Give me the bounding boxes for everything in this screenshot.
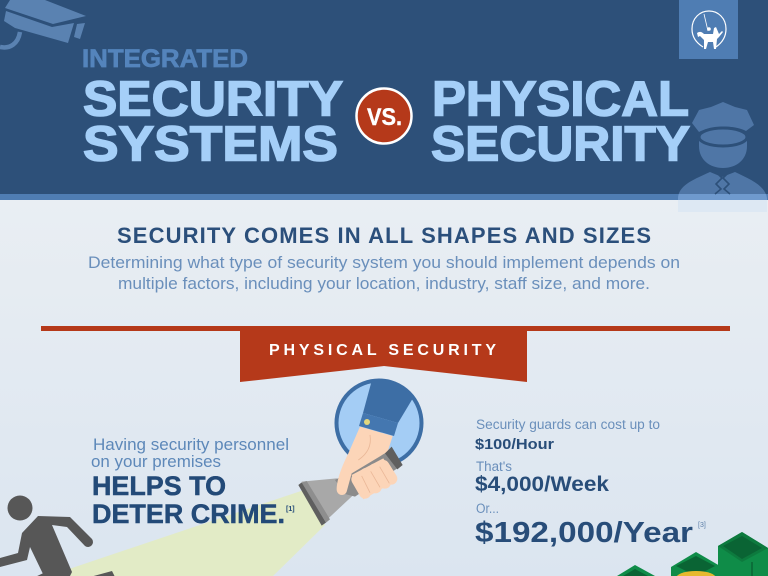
text block: guard costs: Or... [476, 501, 499, 516]
icon: running figure [0, 496, 115, 576]
section banner: physical security [41, 326, 730, 382]
text block: intro: Determining what type of security system you should implement depends on [88, 253, 680, 272]
icon: vs badge [356, 88, 412, 144]
flashlight beam [50, 490, 325, 576]
text block: guard costs [475, 417, 706, 549]
text block: guard costs: That's [476, 459, 512, 474]
callout: helps to deter crime [92, 471, 285, 529]
sleeve circle [336, 380, 422, 466]
section banner: physical security: PHYSICAL SECURITY [269, 342, 496, 359]
text block: having security personnel [91, 435, 289, 471]
text block: having security personnel: on your premises [91, 452, 221, 471]
callout: helps to deter crime: HELPS TO [92, 471, 226, 501]
sleeve [363, 382, 412, 423]
cuff [359, 413, 398, 436]
text block: guard costs: $192,000/Year [475, 517, 693, 549]
cuff button [364, 419, 370, 425]
panel: header banner [0, 0, 768, 200]
title: security systems: SECURITY [83, 72, 343, 126]
text block: guard costs: $4,000/Week [475, 473, 609, 496]
text block: intro: multiple factors, including your location, industry, staff size, and more. [118, 274, 650, 293]
icon: vs badge: VS. [367, 104, 402, 131]
hand and flashlight [298, 427, 403, 526]
illustration: hand holding flashlight [298, 376, 422, 526]
icon: money stacks [617, 532, 768, 576]
title: security systems: SYSTEMS [83, 118, 338, 172]
icon: police officer [678, 102, 767, 212]
icon: security camera [0, 0, 86, 47]
text block: guard costs: $100/Hour [475, 436, 554, 453]
text block: guard costs: [3] [698, 522, 706, 529]
title: physical security: SECURITY [431, 118, 690, 172]
title: physical security [431, 72, 690, 172]
heading: integrated: INTEGRATED [82, 45, 248, 73]
callout: helps to deter crime: DETER CRIME. [92, 499, 285, 529]
text block: having security personnel: Having security personnel [93, 435, 289, 454]
title: security systems [83, 72, 343, 172]
icon: company logo badge [679, 0, 738, 59]
heading: security comes in all shapes and sizes: SECURITY COMES IN ALL SHAPES AND SIZES [117, 223, 651, 248]
text block: intro [88, 253, 680, 293]
footnote 1: [1] [286, 506, 295, 513]
title: physical security: PHYSICAL [432, 72, 689, 126]
text block: guard costs: Security guards can cost up to [476, 417, 660, 432]
